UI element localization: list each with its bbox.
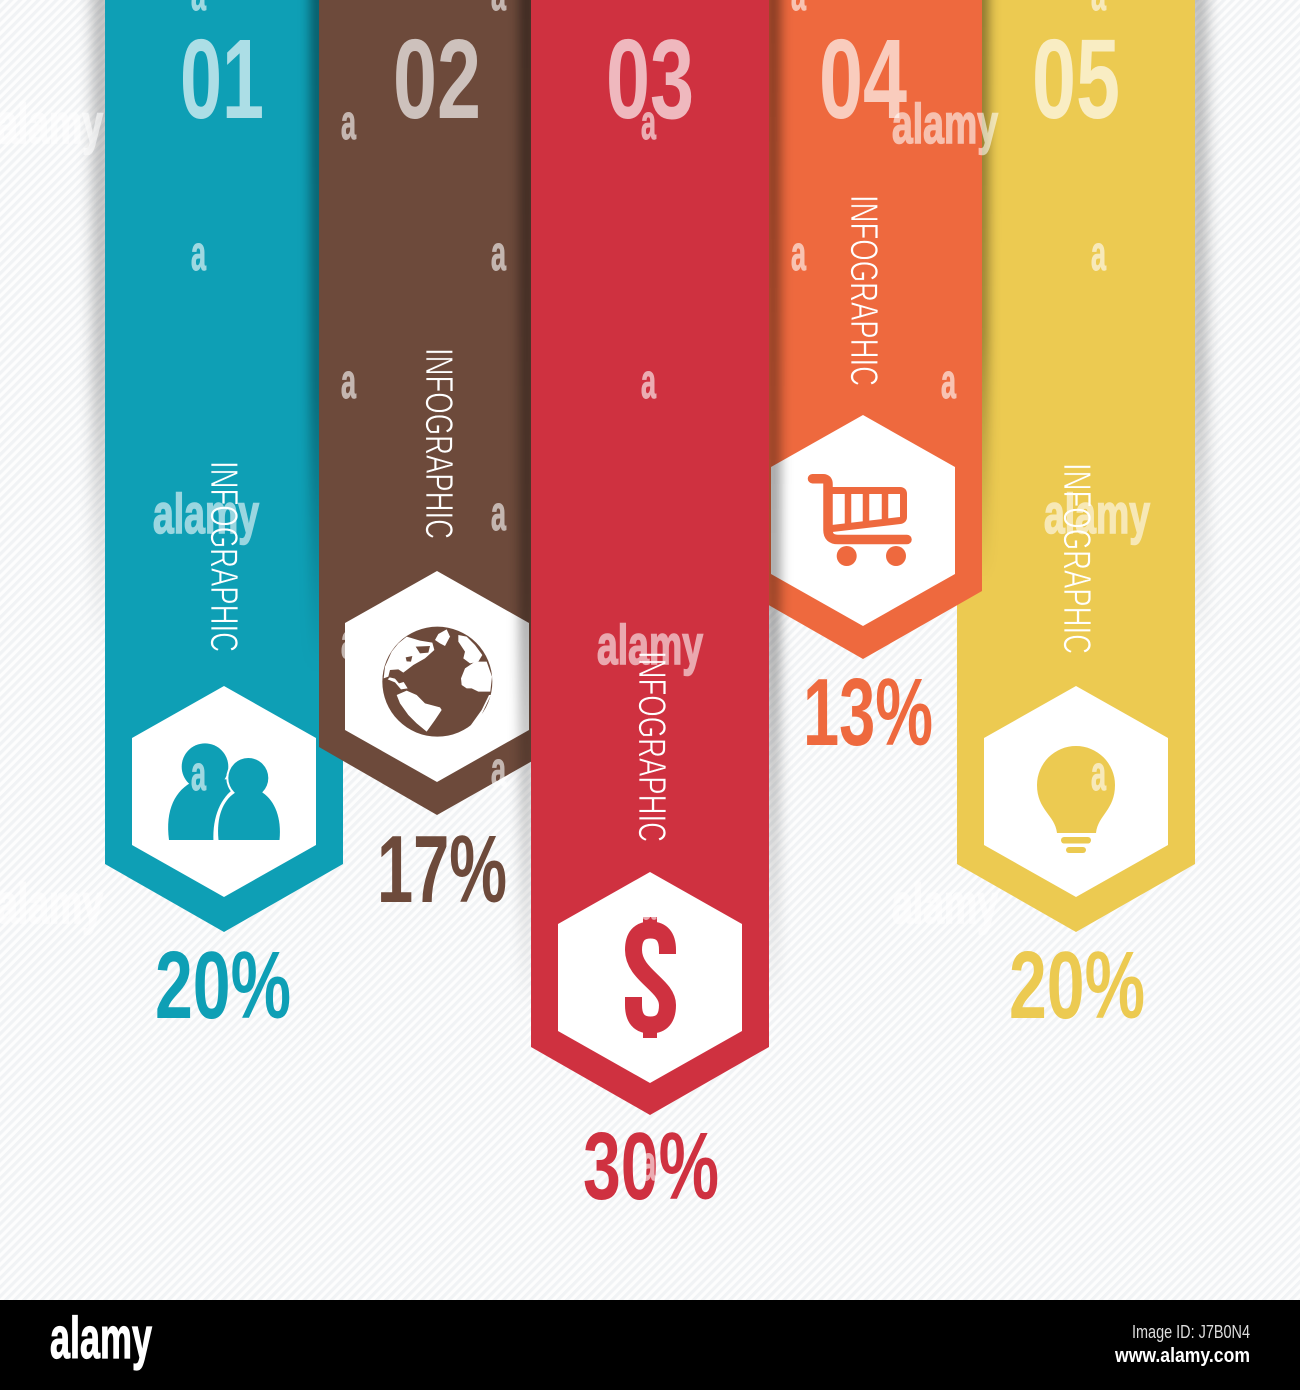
website: www.alamy.com [1114, 1345, 1250, 1367]
watermark: small repeated letters: a [491, 227, 506, 281]
icon: two people [168, 743, 280, 842]
number 01: 01 [180, 16, 264, 142]
watermark: small repeated letters: a [791, 227, 806, 281]
watermark: small repeated letters [191, 0, 1106, 1191]
watermark: alamy logos: alamy [892, 92, 998, 155]
watermark: small repeated letters: a [941, 355, 956, 409]
outer shadows beside the first and last ribbons [94, 0, 1206, 650]
hexagon 03 [558, 872, 742, 1083]
panel: ribbon 01 teal [105, 0, 343, 932]
percentage: 20% yellow: 20% [1009, 932, 1145, 1039]
panel: ribbon 05 yellow [957, 0, 1195, 932]
label: infographic 02: INFOGRAPHIC [417, 348, 460, 539]
hexagon 05 [984, 686, 1168, 897]
watermark: alamy logos: alamy [597, 613, 703, 676]
label: infographic 03: INFOGRAPHIC [630, 651, 673, 842]
icon: light bulb [1037, 746, 1115, 853]
label: infographic 01: INFOGRAPHIC [202, 461, 245, 652]
panel: ribbon 02 brown [319, 0, 557, 815]
panel: ribbon 04 orange [744, 0, 982, 659]
watermark: small repeated letters: a [341, 96, 356, 150]
icon: dollar sign [634, 917, 668, 1038]
panel: ribbon 03 red [531, 0, 769, 1115]
shadow cast by orange ribbon on yellow [974, 0, 988, 580]
watermark: alamy logos: alamy [0, 92, 103, 155]
watermark: alamy logos [0, 92, 1150, 935]
icon: globe [382, 627, 492, 737]
watermark: small repeated letters: a [191, 747, 206, 801]
watermark: small repeated letters: a [641, 1137, 656, 1191]
watermark: small repeated letters: a [1091, 227, 1106, 281]
hexagon 01 [132, 686, 316, 897]
watermark: small repeated letters: a [491, 743, 506, 797]
watermark: small repeated letters: a [1091, 747, 1106, 801]
watermark: alamy logos: alamy [892, 872, 998, 935]
percentage: 20% teal: 20% [155, 932, 291, 1039]
percentage: 30% red: 30% [583, 1113, 719, 1220]
percentage: 17% brown: 17% [377, 816, 507, 923]
shadow cast by brown ribbon on teal [311, 0, 325, 670]
number 03: 03 [606, 16, 694, 142]
hexagon 02 [345, 571, 529, 782]
label: infographic 05: INFOGRAPHIC [1055, 463, 1098, 654]
watermark: small repeated letters: a [641, 96, 656, 150]
number 04: 04 [819, 16, 907, 142]
number 05: 05 [1032, 16, 1120, 142]
footer logo: alamy [50, 1306, 152, 1371]
number 02: 02 [393, 16, 481, 142]
watermark: small repeated letters: a [191, 227, 206, 281]
label: infographic 04: INFOGRAPHIC [842, 195, 885, 386]
icon: shopping cart [812, 479, 907, 566]
watermark: alamy logos: alamy [153, 482, 259, 545]
watermark: small repeated letters: a [641, 355, 656, 409]
watermark: small repeated letters: a [491, 487, 506, 541]
footer bar [0, 1300, 1300, 1390]
shadows cast by red ribbon on its neighbours [520, 0, 780, 1010]
image id: Image ID: J7B0N4 [1132, 1322, 1250, 1342]
watermark: small repeated letters: a [341, 615, 356, 669]
watermark: small repeated letters: a [641, 876, 656, 930]
watermark: alamy logos: alamy [1044, 482, 1150, 545]
watermark: small repeated letters: a [341, 355, 356, 409]
percentage: 13% orange: 13% [803, 659, 933, 766]
hexagon 04 [771, 415, 955, 626]
watermark: alamy logos: alamy [0, 872, 103, 935]
